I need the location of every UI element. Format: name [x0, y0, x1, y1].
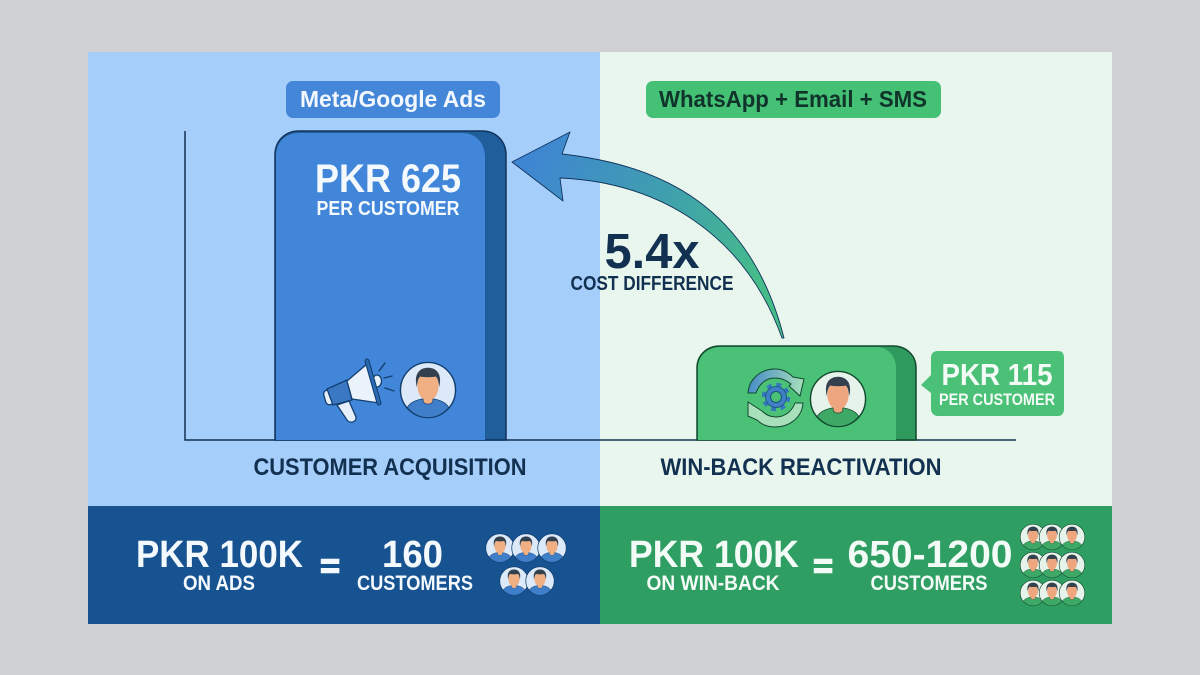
stat: PKR 100K on win-back: PKR 100K: [629, 534, 800, 576]
stat: 650-1200 customers: 650-1200: [848, 534, 1012, 576]
stat: PKR 100K on win-back: [629, 534, 800, 595]
bar: customer acquisition: [275, 131, 506, 440]
stat: 160 customers: 160: [382, 534, 443, 576]
panel: customer acquisition background: [88, 52, 600, 506]
icon: megaphone: [323, 361, 394, 422]
callout: PKR 115 per customer: PKR 115: [942, 357, 1052, 392]
stat: 650-1200 customers: CUSTOMERS: [870, 571, 988, 595]
stat: PKR 100K on ads: [136, 534, 304, 595]
panel: ads result: [88, 506, 600, 624]
callout: PKR 115 per customer: [921, 351, 1064, 416]
stat: 160 customers: [357, 534, 473, 595]
bar value: PKR 625 per customer: [315, 157, 461, 220]
tag: WhatsApp + Email + SMS: WhatsApp + Email + SMS: [659, 86, 927, 112]
panel: win-back background: [600, 52, 1112, 506]
bar: win-back reactivation: [697, 346, 916, 440]
icon: customer group: [486, 534, 566, 595]
tag: Meta/Google Ads: [286, 81, 500, 118]
icon: customer group: [1020, 524, 1085, 606]
panel: win-back result: [600, 506, 1112, 624]
arrow: win-back to acquisition: [512, 132, 784, 338]
label: win-back reactivation: WIN-BACK REACTIVATION: [660, 454, 942, 481]
bar value: PKR 625 per customer: PER CUSTOMER: [316, 197, 460, 220]
icon: customer avatar: [810, 371, 866, 427]
stat: 160 customers: CUSTOMERS: [357, 571, 473, 595]
callout: 5.4x cost difference: COST DIFFERENCE: [570, 272, 734, 295]
equals sign: =: [813, 548, 833, 586]
stat: PKR 100K on ads: ON ADS: [183, 571, 255, 595]
label: customer acquisition: CUSTOMER ACQUISITION: [254, 454, 526, 481]
chart axes: [185, 131, 1016, 440]
tag: WhatsApp + Email + SMS: [646, 81, 941, 118]
icon: recycle gear: [748, 369, 804, 427]
equals sign: =: [320, 548, 340, 586]
stat: 650-1200 customers: [848, 534, 1012, 595]
callout: PKR 115 per customer: PER CUSTOMER: [939, 391, 1055, 409]
icon: customer avatar: [400, 362, 456, 418]
stat: PKR 100K on win-back: ON WIN-BACK: [646, 571, 780, 595]
bar value: PKR 625 per customer: PKR 625: [315, 157, 461, 201]
callout: 5.4x cost difference: 5.4x: [604, 225, 700, 279]
stat: PKR 100K on ads: PKR 100K: [136, 534, 304, 576]
tag: Meta/Google Ads: Meta/Google Ads: [300, 86, 486, 112]
callout: 5.4x cost difference: [570, 225, 734, 295]
